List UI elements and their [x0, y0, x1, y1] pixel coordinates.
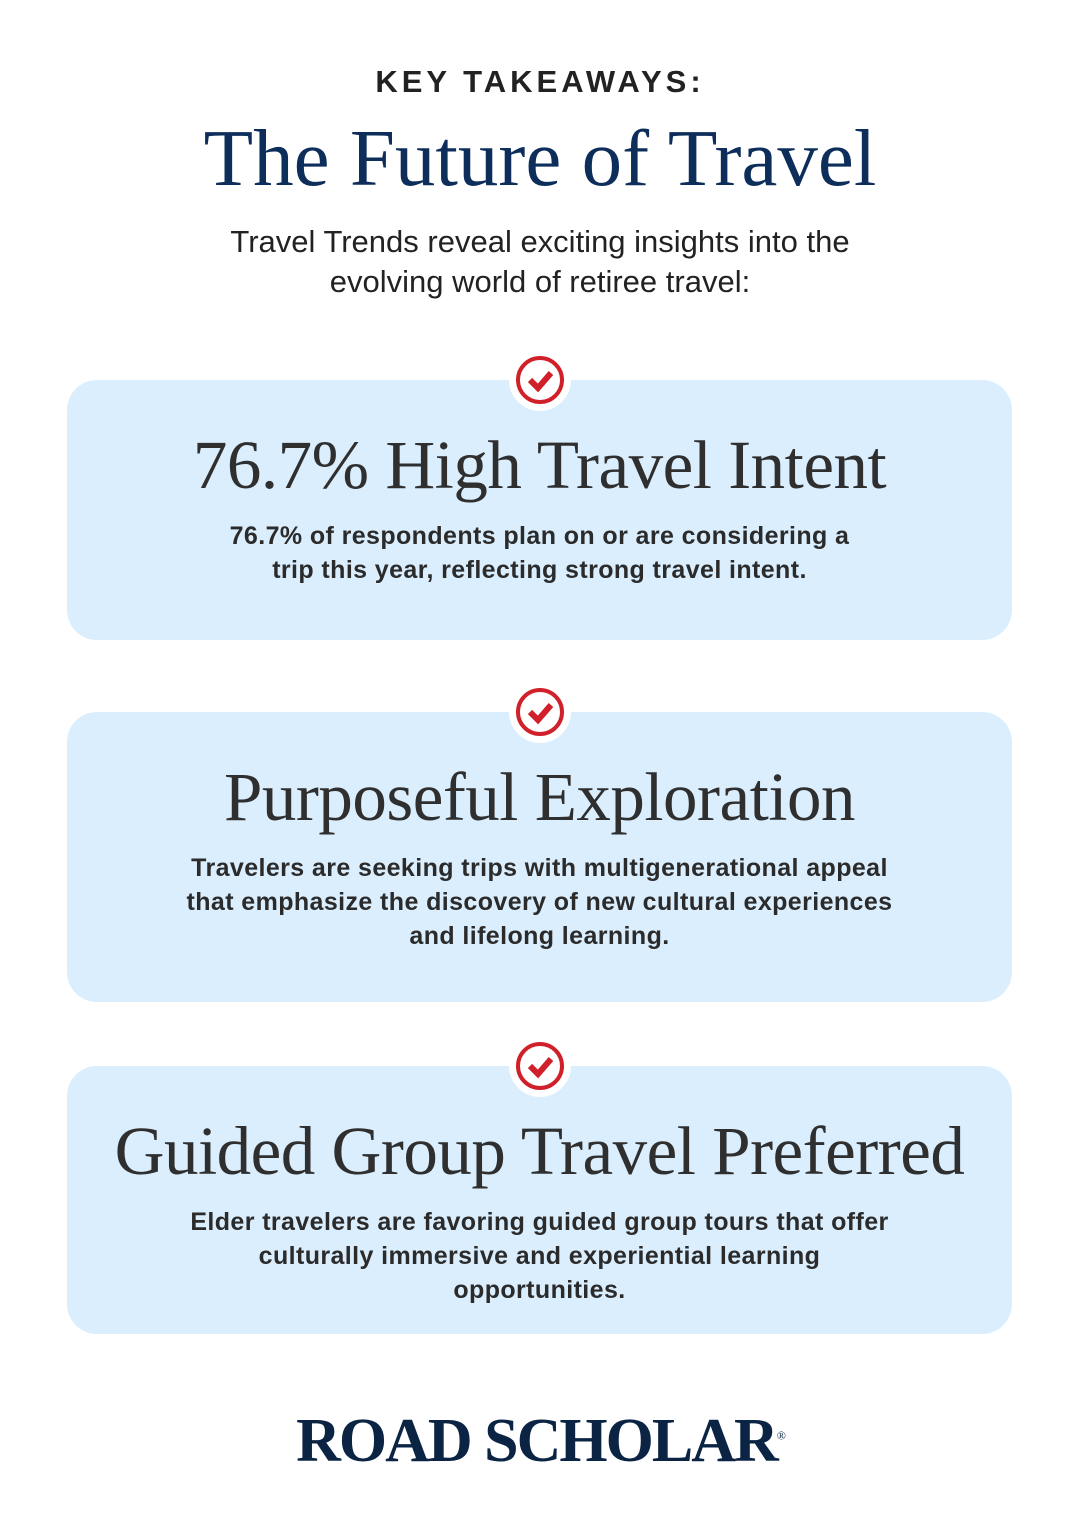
- icon: check 2: [509, 688, 571, 743]
- panel: guided group travel: [67, 1066, 1012, 1334]
- body text: trip this year, reflecting strong travel intent.: [272, 556, 807, 584]
- body text: [186, 854, 892, 950]
- panel: high travel intent: [67, 380, 1012, 640]
- heading: Purposeful Exploration: [224, 759, 855, 835]
- title: The Future of Travel: [204, 113, 876, 203]
- body text: and lifelong learning.: [409, 922, 670, 950]
- heading: 76.7% High Travel Intent: [193, 427, 886, 503]
- body text: opportunities.: [453, 1276, 626, 1304]
- body text: 76.7% of respondents plan on or are considering a: [230, 522, 849, 550]
- body text: culturally immersive and experiential learning: [259, 1242, 820, 1270]
- kicker: KEY TAKEAWAYS:: [375, 64, 705, 99]
- subtitle: [230, 224, 850, 299]
- subtitle: evolving world of retiree travel:: [330, 264, 750, 299]
- body text: that emphasize the discovery of new cultural experiences: [186, 888, 892, 916]
- logo: ROAD SCHOLAR®: [296, 1407, 784, 1475]
- panel: purposeful exploration: [67, 712, 1012, 1002]
- icon: check 3: [509, 1042, 571, 1097]
- body text: Elder travelers are favoring guided group tours that offer: [190, 1208, 889, 1236]
- body text: [190, 1208, 889, 1304]
- body text: Travelers are seeking trips with multigenerational appeal: [191, 854, 888, 882]
- subtitle: Travel Trends reveal exciting insights into the: [230, 224, 850, 259]
- body text: [230, 522, 850, 584]
- icon: check 1: [509, 356, 571, 411]
- heading: Guided Group Travel Preferred: [115, 1113, 964, 1189]
